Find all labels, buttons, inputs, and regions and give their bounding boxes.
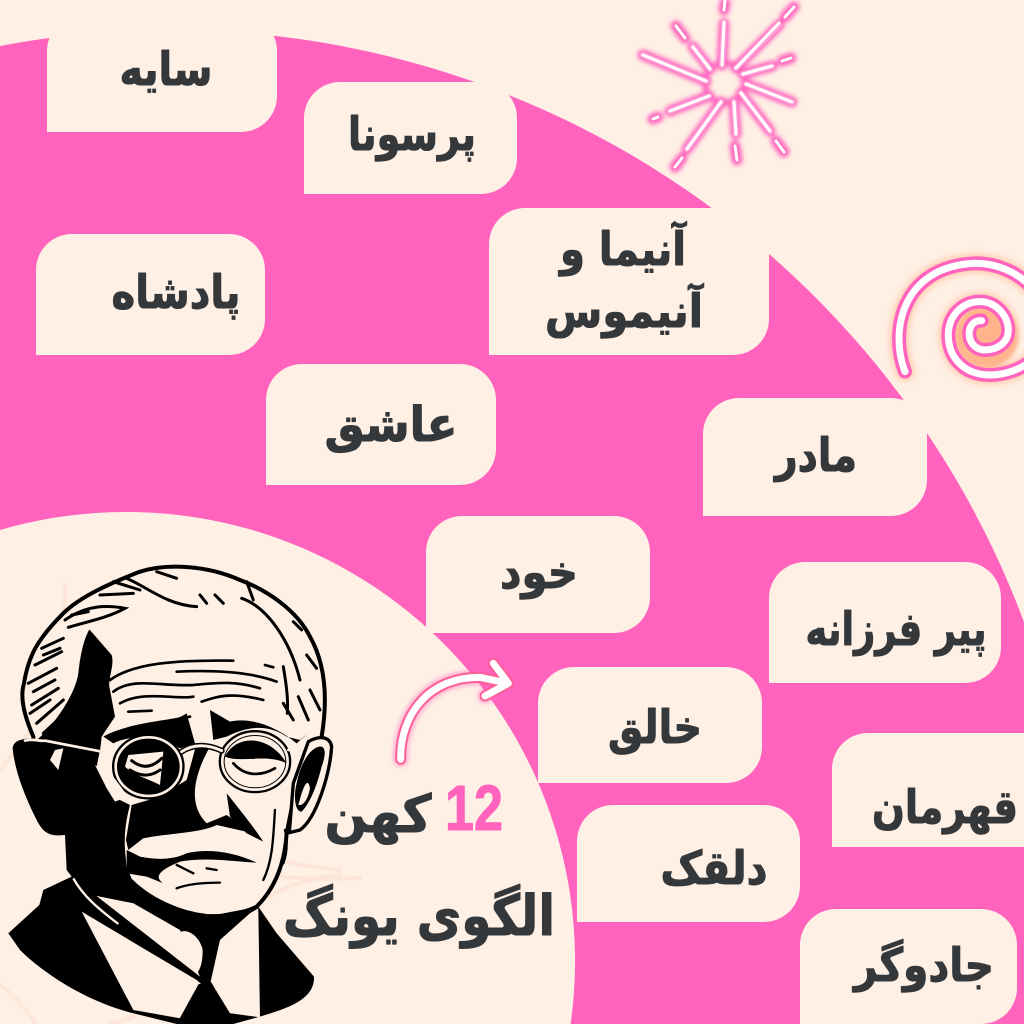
shirt collar [82,912,204,1018]
tie [177,983,232,1024]
label: پرسونا [348,107,476,162]
dark side of head and neck [13,739,258,977]
label: عاشق [324,397,458,453]
label: پادشاه [112,265,240,320]
card: king [36,234,265,355]
label line two: آنیموس [545,283,704,338]
portrait of Jung [8,567,332,1024]
head outline and hair [22,567,325,916]
number 12: 12 [445,772,503,844]
hair shadow wedge [37,629,115,752]
title text [283,772,555,949]
hair strands [28,572,320,733]
glasses [25,733,300,797]
card: shadow [47,15,277,132]
title line two: الگوی یونگ [283,883,555,949]
title word: کهن [324,785,432,845]
icon: neon starburst [643,0,794,167]
right ear [289,738,332,833]
jacket [8,877,314,1024]
label: جادوگر [852,938,994,992]
card: creator [538,667,762,783]
card: lover [266,364,496,485]
label: دلقک [660,841,768,895]
card: hero [832,733,1024,847]
label: خود [500,545,578,599]
mustache [138,831,257,862]
lit hair near temple [95,765,128,802]
faint background curves [0,585,360,1024]
card: persona [304,82,517,194]
card: magician [800,909,1017,1024]
card: jester [577,805,800,922]
starburst rays [643,24,792,149]
card: wise old man [769,562,1001,683]
icon: neon spiral [899,263,1024,375]
forehead wrinkles [107,661,277,737]
cheek and mouth shadow [126,743,253,850]
card: mother [703,398,927,516]
label: سایه [120,42,212,96]
icon: curved arrow [401,663,508,759]
card: anima and animus [489,208,769,355]
cream circle behind portrait [0,512,575,1024]
label: مادر [773,428,857,482]
label line one: آنیما و [558,221,687,276]
card: self [426,516,650,633]
brows and eye sockets [103,713,195,748]
label: خالق [608,700,702,754]
